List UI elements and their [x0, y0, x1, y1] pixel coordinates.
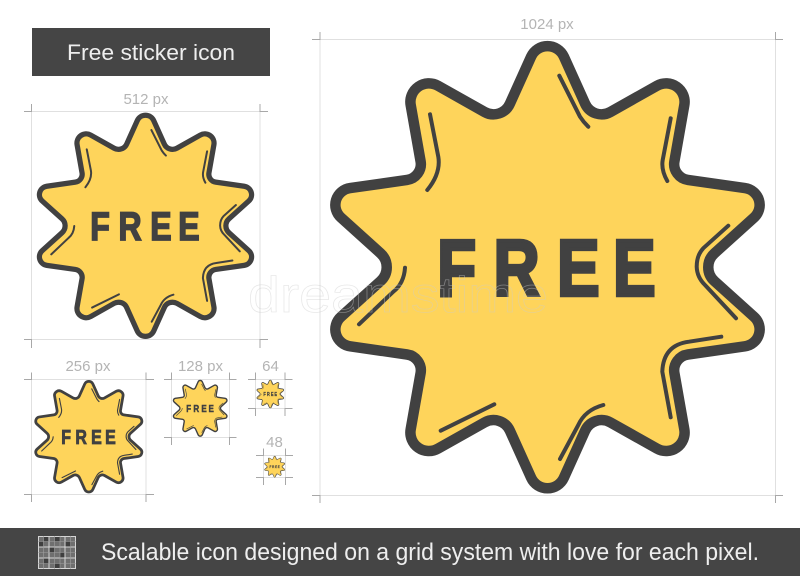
icon: large star sticker: FREE: [437, 224, 656, 313]
icon: star sticker 512: FREE: [90, 204, 200, 249]
footer bar: [0, 528, 800, 576]
panel: 64 px icon: [248, 358, 292, 416]
icon: star sticker 256: [36, 381, 142, 492]
panel: 256 px icon: [24, 358, 154, 502]
size label: 1024 px: 1024 px: [520, 16, 574, 33]
footer caption: Scalable icon designed on a grid system with love for each pixel.: [101, 539, 759, 566]
guide frame: 64 px: [248, 372, 292, 416]
title banner: [32, 28, 270, 76]
size label: 512 px: 512 px: [123, 91, 169, 108]
guide frame: 1024 px: [312, 32, 783, 503]
panel: 512 px icon: [24, 91, 268, 348]
size label: 64: 64: [262, 358, 279, 375]
guide frame: 256 px: [24, 372, 154, 502]
icon: pixel grid: [38, 536, 76, 569]
panel: 128 px icon: [164, 358, 236, 445]
icon: star sticker 256: FREE: [61, 426, 116, 448]
guide frame: 128 px: [164, 372, 236, 445]
size label: 256 px: 256 px: [65, 358, 111, 375]
guide frame: 48 px: [256, 448, 293, 485]
guide frame: 512 px: [24, 104, 268, 348]
size label: 48: 48: [266, 434, 283, 451]
icon: star sticker 512: [39, 115, 252, 336]
panel: 48 px icon: [256, 434, 293, 485]
panel: 1024 px icon: [312, 16, 783, 503]
icon: star sticker 48: FREE: [269, 465, 280, 469]
size label: 128 px: 128 px: [178, 358, 224, 375]
icon: star sticker 128: FREE: [186, 403, 214, 414]
title banner: Free sticker icon: [67, 40, 235, 65]
watermark: dreamstime: [248, 267, 548, 323]
icon: star sticker 64: FREE: [263, 391, 277, 397]
